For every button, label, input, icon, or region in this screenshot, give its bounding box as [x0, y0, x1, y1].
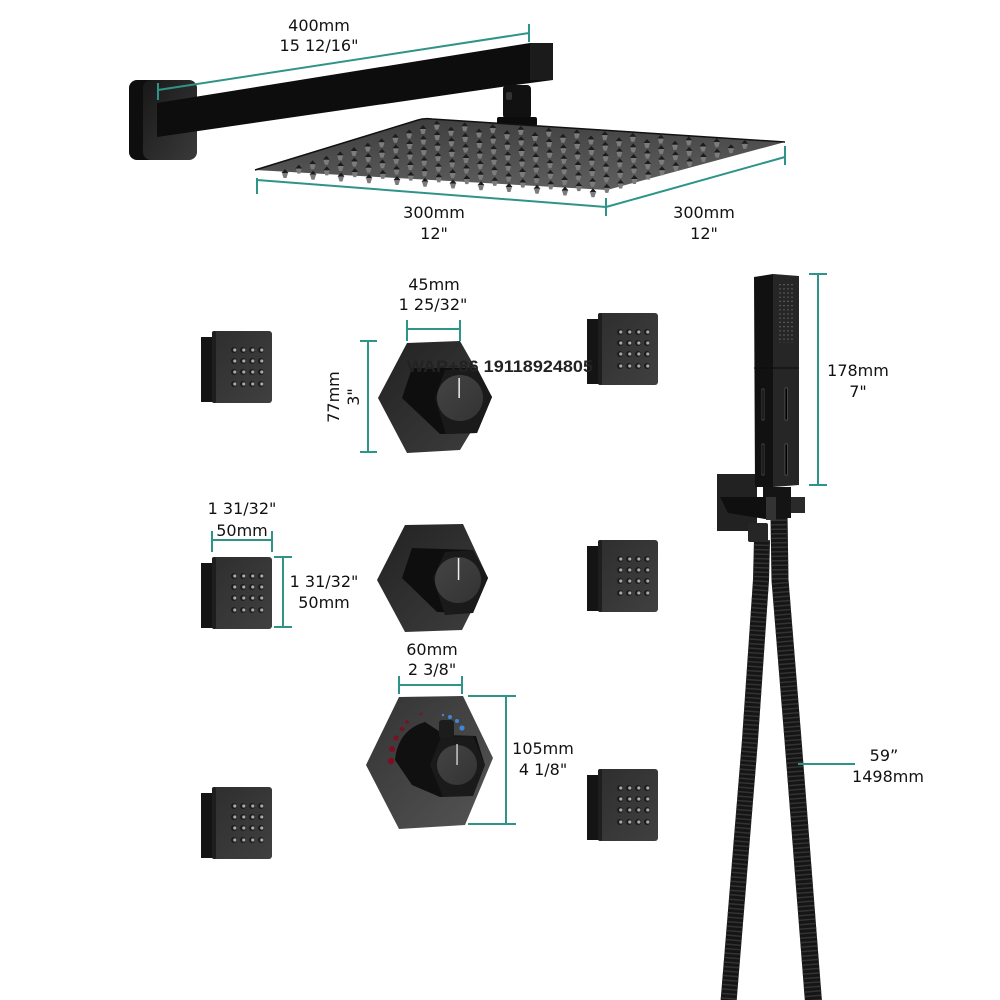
dimension: plate height 105mm: 4 1/8": [519, 760, 567, 779]
wall arm and flange: [129, 43, 553, 160]
dimension: hose length 1498mm: 59”: [870, 746, 898, 765]
dimension: valve height 77mm: 3": [344, 388, 363, 406]
side slots: [762, 388, 788, 475]
dimension: hand shower 178mm: 7": [849, 382, 867, 401]
square rain shower head: [255, 119, 785, 197]
red hot dots: [388, 713, 422, 764]
dimension: jet height 50mm: 1 31/32": [290, 572, 358, 591]
body jet bottom right: [587, 769, 658, 841]
dimension: head width 300mm: 300mm: [403, 203, 465, 222]
dimension: jet height 50mm: [274, 557, 358, 627]
watermark phone number: WAP+86 19118924805: [407, 357, 593, 376]
dimension: jet width 50mm: [208, 499, 276, 552]
dimension: jet height 50mm: 50mm: [298, 593, 350, 612]
dimension: head depth 300mm: [606, 146, 785, 243]
dimension: head width 300mm: [257, 178, 606, 243]
nozzle grid: [282, 121, 748, 197]
dimension: hose length 1498mm: 1498mm: [852, 767, 924, 786]
wall holder bracket: [717, 474, 805, 542]
spray holes: [780, 284, 792, 343]
body jet top right: [587, 313, 658, 385]
body jet bottom left: [201, 787, 272, 859]
top hexagon valve: [378, 341, 492, 453]
dimension: valve knob 45mm: 1 25/32": [399, 295, 467, 314]
dimension: hand shower 178mm: 178mm: [827, 361, 889, 380]
dimension: arm length 400mm: 400mm: [288, 16, 350, 35]
body jet top left: [201, 331, 272, 403]
hand shower: [754, 274, 799, 487]
middle hexagon valve: [377, 524, 488, 632]
dimension: plate height 105mm: 105mm: [512, 739, 574, 758]
dimension: plate width 60mm: 2 3/8": [408, 660, 456, 679]
dimension: hose length 1498mm: [798, 746, 924, 786]
dimension: jet width 50mm: 1 31/32": [208, 499, 276, 518]
blue cold dots: [442, 714, 465, 731]
dimension: head width 300mm: 12": [420, 224, 448, 243]
dimension: head depth 300mm: 300mm: [673, 203, 735, 222]
dimension: valve height 77mm: [324, 341, 377, 452]
dimension: valve knob 45mm: 45mm: [408, 275, 460, 294]
thermostatic valve with temperature dots: [366, 696, 493, 829]
shower head swivel joint: [497, 85, 537, 126]
dimension: arm length 400mm: 15 12/16": [280, 36, 358, 55]
dimension: plate height 105mm: [468, 696, 574, 824]
dimension: plate width 60mm: [399, 640, 462, 694]
hoses: [728, 515, 814, 1000]
dimension: arm length 400mm: [158, 16, 529, 100]
dimension: jet width 50mm: 50mm: [216, 521, 268, 540]
dimension: plate width 60mm: 60mm: [406, 640, 458, 659]
body jet middle right: [587, 540, 658, 612]
dimension: hand shower 178mm: [809, 274, 889, 485]
dimension: valve height 77mm: 77mm: [324, 371, 343, 423]
dimension: head depth 300mm: 12": [690, 224, 718, 243]
dimension: valve knob 45mm: [399, 275, 467, 341]
body jet middle left: [201, 557, 272, 629]
